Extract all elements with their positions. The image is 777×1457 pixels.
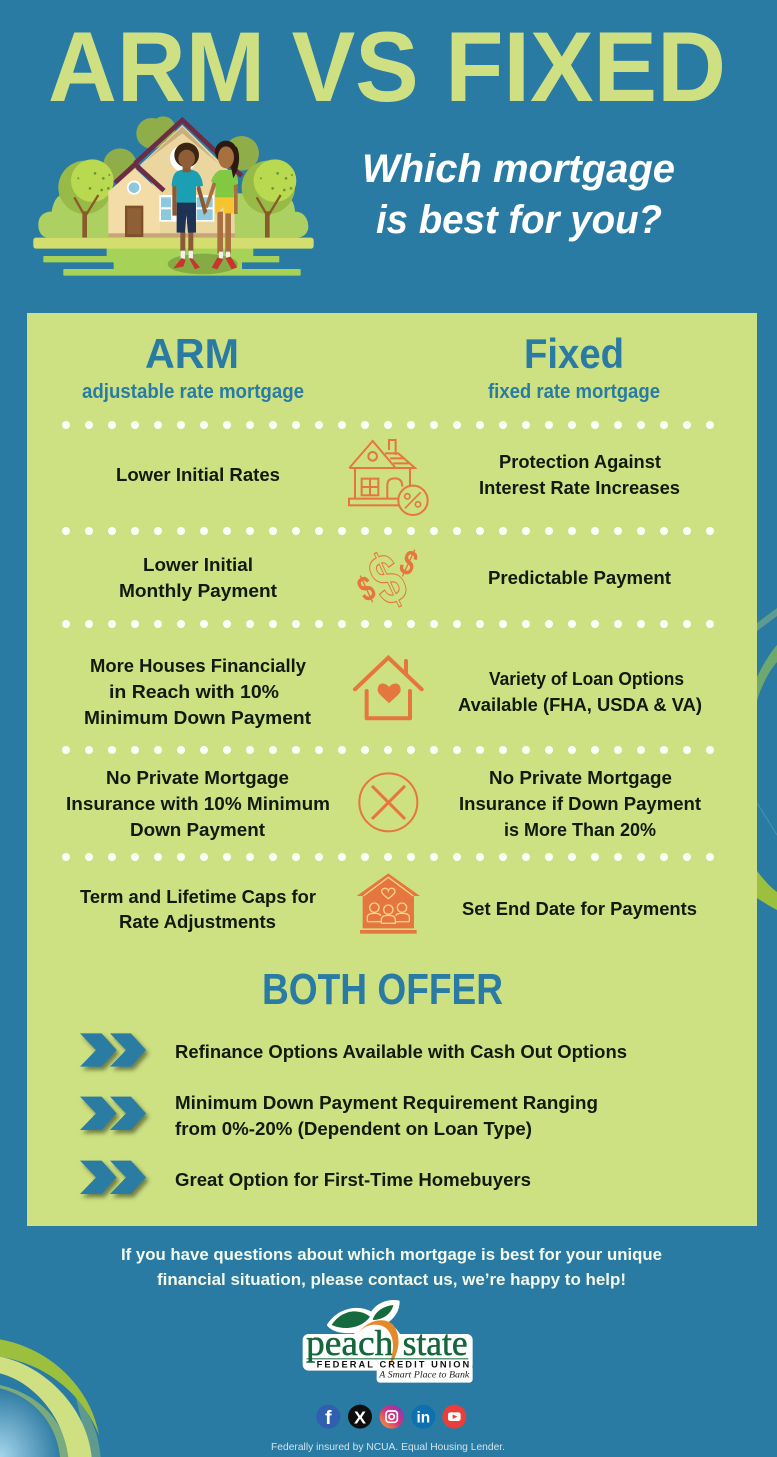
bullet 3 text: Great Option for First-Time Homebuyers: [175, 1169, 531, 1190]
house: [108, 120, 242, 237]
icon: dollar signs: $: [358, 537, 418, 622]
dotted dividers: [62, 421, 714, 861]
closing text: If you have questions about which mortgage is best for your unique: [121, 1245, 662, 1264]
icon: instagram: [380, 1405, 404, 1429]
icon: linkedin: [411, 1405, 435, 1429]
row 4 left text: No Private Mortgage: [106, 767, 289, 788]
bullet 2 text: from 0%-20% (Dependent on Loan Type): [175, 1118, 532, 1139]
logo: Peach State FCU: [303, 1301, 473, 1383]
row 5 left text: Rate Adjustments: [119, 911, 276, 932]
logo: Peach State FCU: FEDERAL CREDIT UNION: [317, 1360, 470, 1370]
subtitle: Which mortgage: [362, 147, 675, 191]
row 4 right text: is More Than 20%: [504, 819, 656, 840]
row 4 left text: [66, 767, 330, 840]
row 2 right text: Predictable Payment: [488, 567, 671, 588]
row 5 right text: Set End Date for Payments: [462, 898, 697, 919]
bullet 2 chevrons: [80, 1097, 146, 1130]
subtitle: is best for you?: [376, 198, 662, 242]
icon: youtube: [442, 1405, 466, 1429]
icon: facebook: [316, 1405, 340, 1429]
icon: X: X: [354, 1407, 366, 1427]
peach arc: [357, 1320, 399, 1367]
title: ARM VS FIXED: [48, 11, 726, 122]
illustration: couple in front of house: [33, 116, 314, 275]
icon: dollar signs: $: [351, 567, 381, 610]
icon: circled X: [359, 773, 417, 831]
bullet 3 chevrons: [80, 1161, 146, 1194]
wordmark: [306, 1323, 468, 1363]
icon: linkedin: in: [417, 1410, 430, 1427]
decorative swooshes right side: [757, 608, 777, 910]
subtitle: [362, 147, 675, 242]
panel: comparison: [27, 313, 757, 1226]
row 4 right text: No Private Mortgage: [489, 767, 672, 788]
heading: Fixed: Fixed: [524, 330, 624, 377]
bullet 2 text: Minimum Down Payment Requirement Ranging: [175, 1092, 598, 1113]
icon: house with heart: [355, 658, 422, 718]
row 5 left text: Term and Lifetime Caps for: [80, 886, 316, 907]
heading: ARM: ARM: [145, 330, 239, 377]
icon: facebook: f: [325, 1408, 332, 1429]
row 3 left text: [84, 655, 311, 728]
icon: house with percent: [349, 440, 428, 515]
row 2 left text: [119, 554, 277, 601]
heading: both offer: BOTH OFFER: [262, 965, 503, 1014]
left tree: [58, 159, 114, 238]
heading: ARM: [82, 330, 304, 403]
right tree: [242, 159, 296, 238]
decorative swooshes bottom left: [0, 1339, 101, 1457]
row 3 right text: [458, 668, 702, 715]
wordmark: state: [403, 1323, 468, 1363]
heading: ARM: adjustable rate mortgage: [82, 381, 304, 403]
row 5 left text: [80, 886, 316, 932]
row 1 right text: Interest Rate Increases: [479, 477, 680, 498]
row 1 right text: [479, 451, 680, 498]
icon: family house: [357, 873, 420, 934]
heading: Fixed: [488, 330, 660, 403]
logo: Peach State FCU: A Smart Place to Bank: [378, 1370, 470, 1380]
closing text: financial situation, please contact us, we’re happy to help!: [157, 1270, 626, 1289]
row 2 left text: Lower Initial: [143, 554, 253, 575]
row 4 right text: Insurance if Down Payment: [459, 793, 701, 814]
man: [172, 143, 207, 269]
row 3 left text: More Houses Financially: [90, 655, 307, 676]
bullet 1 text: Refinance Options Available with Cash Out Options: [175, 1041, 627, 1062]
bushes and hill: [38, 116, 308, 238]
row 2 left text: Monthly Payment: [119, 580, 277, 601]
row 3 left text: Minimum Down Payment: [84, 707, 311, 728]
row 1 left text: Lower Initial Rates: [116, 464, 280, 485]
wordmark: peach: [306, 1323, 393, 1363]
row 4 left text: Insurance with 10% Minimum: [66, 793, 330, 814]
heading: Fixed: fixed rate mortgage: [488, 381, 660, 403]
social icons: [316, 1405, 466, 1429]
icon: dollar signs: $: [394, 541, 424, 584]
row 1 right text: Protection Against: [499, 451, 661, 472]
legal note: Federally insured by NCUA. Equal Housing Lender.: [271, 1441, 505, 1453]
row 3 right text: Variety of Loan Options: [489, 668, 684, 689]
row 3 right text: Available (FHA, USDA & VA): [458, 694, 702, 715]
bullet 1 chevrons: [80, 1033, 146, 1067]
row 4 left text: Down Payment: [130, 819, 265, 840]
icon: X: [348, 1405, 372, 1429]
ground: [44, 249, 300, 275]
leaves: [332, 1311, 370, 1328]
row 4 right text: [459, 767, 701, 840]
woman: [205, 141, 239, 269]
bullet 2 text: [175, 1092, 598, 1139]
closing text: [121, 1245, 662, 1289]
row 3 left text: in Reach with 10%: [109, 681, 279, 702]
